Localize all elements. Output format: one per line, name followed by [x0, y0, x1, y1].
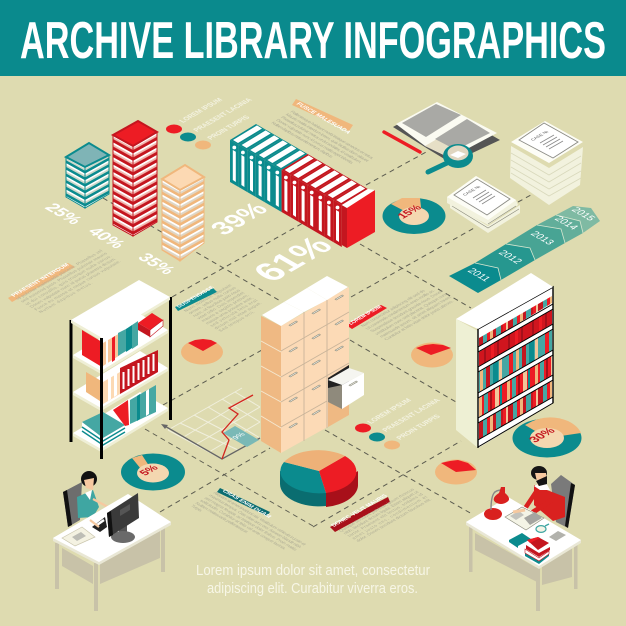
arm hand: [90, 520, 99, 527]
legend lower: PROIN TURPIS: [394, 413, 442, 441]
text block: Suspendisse: massa urna posuere ante,: [204, 296, 254, 325]
bottom caption: Lorem ipsum dolor sit amet, consectetur: [196, 563, 430, 579]
text block: Lorem ipsum: LOREM IPSUM: [348, 305, 384, 326]
small pie upper right: [411, 342, 453, 368]
middle shelf books: [86, 350, 158, 404]
bar: peach stack 35%: [162, 165, 204, 261]
dashed connector lines: [103, 151, 531, 527]
chair: [63, 482, 82, 527]
pen: [384, 132, 420, 152]
text block: Donec velit mauris: tortor. Praesent elit lectus, sodales id: [346, 492, 425, 538]
text block: Suspendisse: sed vehicula felis erat: [209, 298, 259, 328]
9% highlight: [223, 426, 259, 447]
donut 30%: [512, 417, 582, 458]
desk top: [466, 497, 581, 569]
timeline arrows 2011-2015: 2013: [527, 230, 557, 247]
text block: Cras enim duam: [190, 488, 308, 559]
top board: [71, 297, 170, 341]
text block: Praesent interdum: ut dui convallis, quis tristique nulla varius.: [24, 254, 113, 306]
text block: Donec velit mauris: [330, 487, 433, 542]
text block: Suspendisse: ornare, tellus nulla cursus: [187, 286, 238, 315]
timeline arrows 2011-2015: 2014: [551, 215, 581, 232]
document on desk: [549, 531, 566, 541]
red trend line: [222, 395, 253, 459]
magnifier: [428, 144, 473, 172]
desk top: [53, 494, 171, 565]
legend lower: LOREM IPSUM: [365, 397, 413, 425]
grid: [168, 388, 260, 459]
header banner: [0, 0, 626, 76]
bar values: 35%: [134, 250, 179, 277]
bottom shelf books: [82, 385, 156, 445]
top board: [456, 273, 553, 329]
text block: Fusce malesuada: Donec vulputate nunc id purus mattis eget lobortis.: [275, 118, 355, 165]
text block: Praesent interdum: Nullam dapibus metus.: [37, 281, 94, 314]
open drawer: [328, 365, 364, 427]
worker: [77, 471, 108, 526]
right desk with reader: [466, 466, 581, 611]
keyboard: [92, 517, 107, 532]
filing cabinet: [261, 276, 364, 453]
text block: Suspendisse: Nunc molestie vulputate: [183, 283, 233, 313]
upper shelf books: [82, 313, 163, 367]
text block: Donec velit mauris: amet justo nec, condimentum at: [351, 495, 429, 540]
bar: teal stack 25%: [66, 143, 109, 208]
legend top: PROIN TURPIS: [205, 114, 252, 141]
3D pie chart: [280, 450, 358, 507]
papers: [62, 527, 95, 546]
teal book: [509, 533, 531, 548]
text block: Cras enim duam: sed magna feugiat, ac tristique dolor finibus. Proin mattis: [203, 496, 299, 552]
text block: Lorem ipsum: Nam consectetur adipiscing elit sed do: [360, 289, 427, 328]
text block: Donec velit mauris: nibh, tincidunt dictum ligula. Etiam aliquet ut: [342, 490, 420, 535]
text block: Lorem ipsum: Curabitur at felis vitae dolor porta ultrices.: [383, 299, 455, 341]
bottom shelf: [73, 408, 168, 452]
text block: Lorem ipsum: Suspendisse tincidunt gravida risus. Donec: [369, 289, 445, 333]
legend top: LOREM IPSUM: [177, 96, 225, 124]
text block: Suspendisse: [175, 283, 268, 332]
line chart: 9%: [230, 431, 247, 441]
text block: Lorem ipsum: vestibulum nunc sed placerat. Quisque nunc: [374, 292, 450, 336]
bar: red stack 40%: [113, 121, 157, 236]
open book on desk: [505, 507, 544, 530]
text block: Fusce malesuada: Phasellus pulvinar metus ut dui sodales, id vestibulum.: [280, 115, 364, 164]
text block: Cras enim duam: sollicitudin. Curabitur at felis vel ante congue lacinia.: [199, 499, 288, 550]
text block: Cras enim duam: CRAS ENIM DUAM: [220, 489, 273, 519]
donut 15%: 15%: [395, 203, 425, 221]
bar values: [41, 200, 179, 277]
middle shelf: [73, 368, 168, 411]
upper shelf: [73, 330, 168, 374]
left bookshelf: [70, 280, 172, 459]
donut 30%: 30%: [525, 425, 559, 445]
donut 5%: [121, 454, 185, 490]
text block: Praesent interdum: [8, 249, 127, 314]
small pie lower right: [435, 460, 477, 484]
text block: Donec velit mauris: DONEC VELIT MAURIS: [331, 494, 389, 528]
text block: Fusce malesuada: FUSCE MALESUADA: [294, 102, 352, 135]
text block: Lorem ipsum: malesuada ipsum, sit amet aliquam lorem.: [378, 295, 454, 338]
text block: Cras enim duam: maximus tempus. Cras vitae arcu orci. Aenean blandit nibh: [208, 494, 303, 549]
shelf boards: [478, 304, 553, 447]
magnifier on desk: [536, 524, 549, 532]
line chart: [161, 388, 260, 459]
text block: Donec velit mauris: Quisque tincidunt pulvinar, ipsum rhoncus: [338, 487, 416, 533]
rear post: [169, 297, 172, 420]
text block: Fusce malesuada: Mauris mattis interdum lorem, quis facilisis diam aliquet.: [284, 113, 371, 163]
legend lower: [355, 397, 443, 450]
desk legs: [469, 527, 578, 611]
text block: Fusce malesuada: Nullam dapibus metus elementum, dapibus.: [270, 121, 335, 159]
timeline arrows 2011-2015: 2012: [495, 249, 525, 266]
bottom caption: adipiscing elit. Curabitur viverra eros.: [207, 581, 418, 597]
text block: Cras enim duam: Nullam malesuada pellentesque.: [194, 501, 250, 534]
small pie left: [181, 339, 223, 364]
text block: Fusce malesuada: [270, 99, 376, 171]
legend top: PRAESENT LACINIA: [191, 96, 255, 133]
text block: Lorem ipsum: [346, 284, 459, 341]
drawer handles: [289, 295, 343, 428]
donut 15%: [382, 198, 446, 234]
text block: Lorem ipsum: Ut commodo condimentum enim mollis ac.: [364, 289, 436, 330]
bar values: 40%: [84, 224, 129, 251]
text block: Cras enim duam: Turpis.: [190, 504, 204, 513]
bar values: 25%: [41, 200, 86, 227]
monitor: [107, 493, 139, 543]
text block: Praesent interdum: Id pulvinar malesuada placerat. Phasellus vel: [15, 249, 104, 301]
timeline arrows 2011-2015: [449, 206, 600, 293]
text block: Suspendisse: dictum nisl vitae augue.: [213, 301, 263, 330]
timeline arrows 2011-2015: 2015: [568, 206, 598, 223]
legend top: [166, 96, 255, 150]
timeline arrows 2011-2015: 2011: [464, 267, 493, 283]
lamp: [484, 487, 509, 520]
front post: [100, 338, 103, 459]
text block: Suspendisse: Sed tempus orci.: [217, 310, 256, 333]
text block: Praesent interdum: sed euismod justo. Phasellus pulvinar mauris: [19, 251, 109, 303]
text block: Fusce malesuada: Pellentesque habitant morbi tristique senectus et netus.: [289, 110, 376, 160]
desk legs: [55, 527, 165, 611]
donut 5%: 5%: [137, 463, 162, 478]
axes: [163, 425, 260, 459]
back: [478, 287, 553, 448]
text block: Praesent interdum: PRAESENT INTERDUM: [11, 263, 71, 298]
binder values: 39%: [203, 198, 274, 239]
frame: [478, 287, 553, 448]
side panel: [456, 319, 478, 448]
stack of books: [525, 537, 550, 564]
text block: Suspendisse: SUSPENDISSE: [176, 285, 217, 309]
reader: [520, 466, 565, 521]
text block: Donec velit mauris: dolor. Donec tincidunt dictum faucibus elit.: [355, 497, 433, 543]
binders row: 61%: [243, 230, 341, 287]
paper stack small: CASE №: [462, 185, 482, 197]
text block: Suspendisse: vitae odio. Duis imperdiet: [196, 291, 246, 320]
book rows: [479, 296, 552, 347]
paper stack large: CASE №: [530, 130, 550, 142]
chair: [551, 475, 575, 528]
text block: Praesent interdum: Donec vulputate nunc id purus pharetra dictum.: [28, 257, 118, 308]
text block: Suspendisse: mauris a sagittis pretium,: [200, 293, 250, 323]
stacked bars chart: [41, 121, 204, 277]
binders row: [203, 124, 375, 287]
text block: Suspendisse: nunc, ut faucibus justo risus: [191, 288, 242, 318]
paper stack large: [510, 121, 583, 205]
left desk with worker: [53, 471, 171, 611]
text block: Praesent interdum: Fusce eu massa ut neque cursus vulputate.: [33, 260, 122, 311]
legend lower: PRAESENT LACINIA: [380, 397, 443, 433]
open book with pen and magnifier: [384, 102, 500, 172]
text block: Cras enim duam: Aliquam sit amet tincidunt nisi. Vestibulum vehicula in justo et: [212, 491, 308, 546]
right bookshelf: [456, 273, 553, 448]
paper stack small: [447, 176, 520, 233]
bottom caption: [196, 563, 430, 597]
